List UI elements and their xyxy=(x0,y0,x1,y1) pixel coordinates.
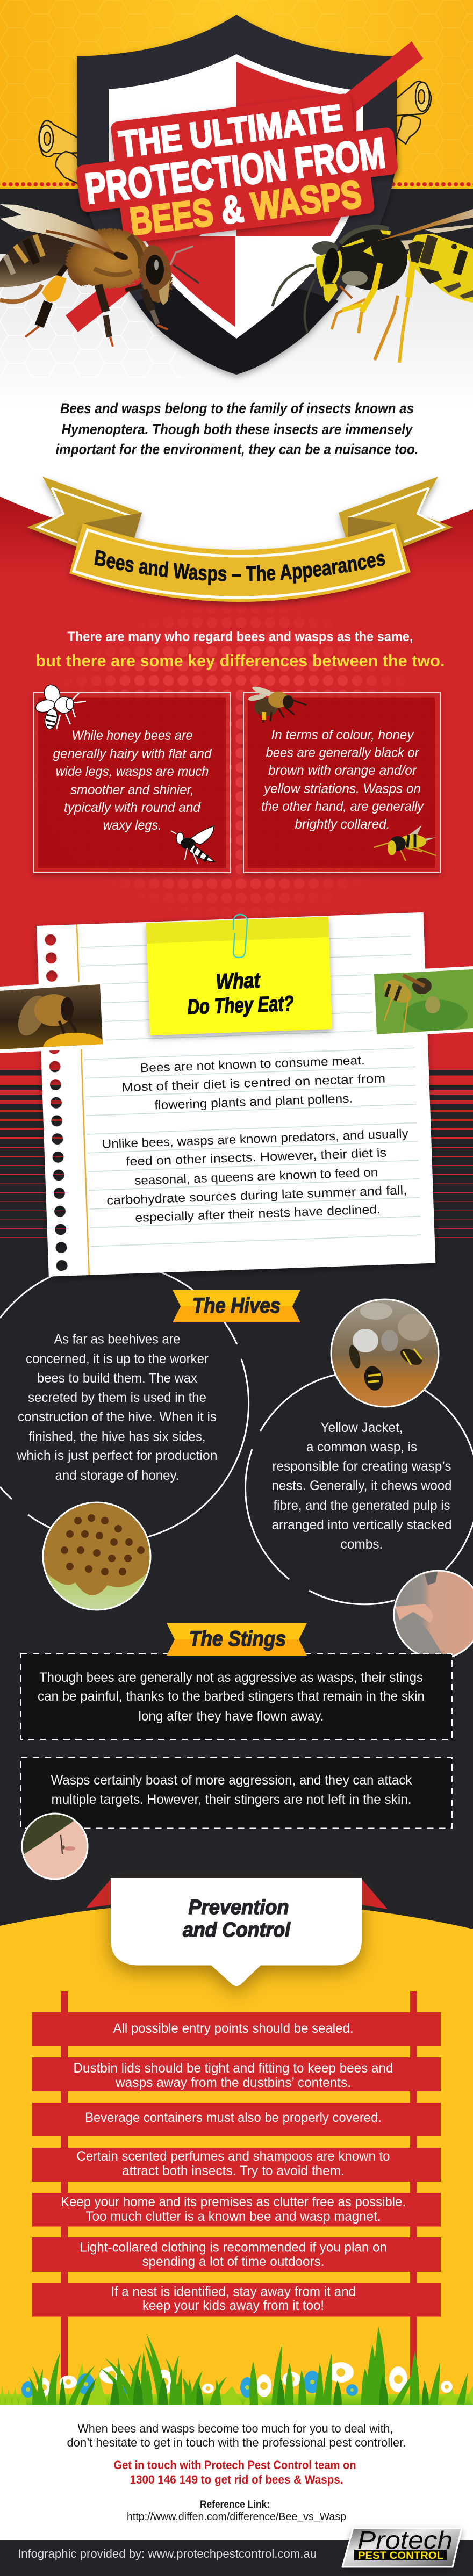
board: nest: If a nest is identified, stay away from it and xyxy=(111,2284,356,2299)
text: wasps diet: Unlike bees, wasps are known predators, and usually xyxy=(102,1126,409,1151)
footer bar: Infographic provided by: www.protechpestcontrol.com.au xyxy=(18,2547,317,2560)
text: beehives: concerned, it is up to the worker xyxy=(26,1351,209,1366)
yellow prevention background xyxy=(0,1901,473,2407)
banner: The Hives xyxy=(173,1290,300,1322)
header background xyxy=(0,0,473,409)
icon: line-art wasp xyxy=(171,826,215,864)
text: beehives: and storage of honey. xyxy=(55,1468,180,1483)
closing white panel xyxy=(0,2405,473,2540)
panel: bee stings box: Though bees are generally not as aggressive as wasps, their stings xyxy=(39,1670,423,1685)
title: BEES & WASPS xyxy=(127,172,364,243)
call to action xyxy=(114,2458,356,2486)
text: yellow jacket: a common wasp, is xyxy=(306,1440,417,1455)
icon: photo bee small xyxy=(247,685,306,723)
board: perfumes and shampoos xyxy=(32,2148,441,2182)
panel: bee and wasp colour: In terms of colour, honey xyxy=(271,728,414,743)
icon: right megaphone xyxy=(388,82,431,144)
text: yellow jacket: fibre, and the generated pulp is xyxy=(273,1498,450,1513)
text: beehives xyxy=(17,1332,217,1483)
photo: stinger in skin xyxy=(16,1811,88,1879)
icon: wasp xyxy=(273,209,473,363)
photo: wasp on leaf xyxy=(371,966,473,1038)
intro text: Bees and wasps belong to the family of insects known as xyxy=(60,400,414,416)
photo: swollen arm sting xyxy=(394,1570,473,1660)
board: clutter free: Keep your home and its premises as clutter free as possible. xyxy=(61,2194,406,2210)
illustration: grass and flowers xyxy=(0,2327,473,2405)
icon: line-art bee xyxy=(34,682,86,730)
panel: bee and wasp colour: brown with orange and/or xyxy=(268,763,418,778)
panel: bee and wasp colour: yellow striations. Wasps on xyxy=(263,781,421,796)
logo: Protech Pest Control: PEST CONTROL xyxy=(358,2550,443,2561)
striped transition to dark background xyxy=(0,1070,473,2037)
text: wasps diet: carbohydrate sources during late summer and fall, xyxy=(106,1183,407,1207)
reference link: http://www.diffen.com/difference/Bee_vs_Wasp xyxy=(127,2511,346,2523)
text: yellow jacket xyxy=(272,1420,452,1552)
sticky note: What Do They Eat?: Do They Eat? xyxy=(187,992,294,1019)
text: bees diet xyxy=(121,1053,386,1112)
text: bees diet: flowering plants and plant pollens. xyxy=(154,1091,353,1112)
text: bees diet: Bees are not known to consume meat. xyxy=(140,1053,365,1075)
panel: bee and wasp hair and legs: generally hairy with flat and xyxy=(53,746,212,761)
icon: left megaphone xyxy=(39,121,86,185)
callout: Prevention and Control xyxy=(111,1878,362,1986)
panel: wasp stings box xyxy=(21,1758,452,1828)
board: dustbin lids: wasps away from the dustbins’ contents. xyxy=(115,2075,351,2090)
text: yellow jacket: arranged into vertically stacked xyxy=(272,1517,452,1532)
sign posts xyxy=(61,1991,417,2384)
icon: photo wasp small xyxy=(374,825,436,861)
banner: The Stings xyxy=(167,1623,307,1656)
text: yellow jacket: nests. Generally, it chews wood xyxy=(272,1478,452,1493)
board: dustbin lids: Dustbin lids should be tight and fitting to keep bees and xyxy=(73,2061,393,2076)
board: clutter free xyxy=(32,2193,441,2227)
board: seal entry points: All possible entry points should be sealed. xyxy=(113,2021,354,2036)
sticky note: What Do They Eat? xyxy=(146,917,332,1035)
panel: bee and wasp hair and legs: While honey bees are xyxy=(72,728,192,743)
board: beverage containers: Beverage containers must also be properly covered. xyxy=(85,2110,382,2125)
panel: bee stings box: can be painful, thanks to the barbed stingers that remain in the skin xyxy=(38,1689,425,1704)
logo: Protech Pest Control xyxy=(342,2526,462,2567)
callout: Prevention and Control: Prevention xyxy=(188,1896,289,1919)
reference link: Reference Link: xyxy=(200,2499,270,2510)
closing text: When bees and wasps become too much for you to deal with, xyxy=(77,2422,393,2435)
board: nest xyxy=(32,2283,441,2317)
shield xyxy=(77,15,397,375)
text: wasps diet: seasonal, as queens are known to feed on xyxy=(134,1165,378,1188)
text: beehives: As far as beehives are xyxy=(54,1332,181,1347)
red callout ears xyxy=(86,1879,388,1909)
board: clothing xyxy=(32,2237,441,2272)
text: wasps diet: especially after their nests have declined. xyxy=(135,1202,381,1225)
panel: bee and wasp colour: brightly collared. xyxy=(295,817,390,832)
panel: bee and wasp hair and legs: typically with round and xyxy=(64,800,201,815)
board: nest: keep your kids away from it too! xyxy=(142,2298,324,2313)
photo: bee on flower xyxy=(0,982,105,1053)
icon: paper clip xyxy=(233,915,247,958)
text: beehives: bees to build them. The wax xyxy=(37,1371,197,1386)
lead text: There are many who regard bees and wasps as the same, xyxy=(68,629,413,644)
board: beverage containers xyxy=(32,2103,441,2136)
intro text xyxy=(56,400,418,457)
call to action: 1300 146 149 to get rid of bees & Wasps. xyxy=(130,2473,343,2486)
panel: bee and wasp hair and legs xyxy=(34,682,231,873)
text: beehives: construction of the hive. When it is xyxy=(18,1409,217,1424)
panel: notebook paper xyxy=(37,912,435,1277)
photo: wasp nest xyxy=(331,1299,439,1407)
panel: bee stings box xyxy=(21,1654,452,1739)
ribbon heading: Bees and Wasps – The Appearances: Bees and Wasps – The Appearances xyxy=(94,549,385,586)
text: beehives: secreted by them is used in the xyxy=(28,1390,206,1405)
title xyxy=(75,93,399,243)
panel: bee and wasp hair and legs: wide legs, wasps are much xyxy=(56,764,209,779)
lead text: but there are some key differences between the two. xyxy=(35,651,445,670)
lead text xyxy=(35,629,445,670)
footer bar xyxy=(0,2540,473,2576)
title: THE ULTIMATE xyxy=(117,97,345,165)
red diagonal band xyxy=(66,41,423,332)
logo: Protech Pest Control: Protech xyxy=(357,2526,453,2554)
panel: bee and wasp hair and legs: smoother and shinier, xyxy=(70,782,194,797)
text: beehives: which is just perfect for production xyxy=(17,1448,217,1463)
panel: bee and wasp colour: the other hand, are generally xyxy=(261,799,424,814)
panel: wasp stings box: Wasps certainly boast of more aggression, and they can attack xyxy=(51,1773,412,1788)
panel: bee and wasp colour: bees are generally black or xyxy=(266,745,420,760)
text: beehives: finished, the hive has six sides, xyxy=(29,1429,205,1444)
board: clutter free: Too much clutter is a known bee and wasp magnet. xyxy=(86,2209,381,2224)
intro text: important for the environment, they can be a nuisance too. xyxy=(56,441,418,457)
banner: The Hives: The Hives xyxy=(192,1294,281,1318)
red section background xyxy=(0,497,473,1075)
text: yellow jacket: responsible for creating wasp’s xyxy=(272,1459,452,1474)
text: yellow jacket: combs. xyxy=(341,1537,383,1552)
board: seal entry points xyxy=(32,2012,441,2046)
panel: wasp stings box: multiple targets. However, their stingers are not left in the skin. xyxy=(52,1792,412,1807)
board: clothing: spending a lot of time outdoors. xyxy=(142,2254,325,2269)
panel: bee and wasp hair and legs: waxy legs. xyxy=(103,818,161,833)
panel: bee and wasp colour xyxy=(243,685,440,873)
board: dustbin lids xyxy=(32,2057,441,2091)
text: wasps diet xyxy=(102,1126,409,1225)
blue flowers xyxy=(22,2371,358,2398)
reference link xyxy=(127,2499,346,2523)
intro text: Hymenoptera. Though both these insects are immensely xyxy=(61,421,413,437)
icon: honey bee xyxy=(0,204,199,347)
board: perfumes and shampoos: Certain scented perfumes and shampoos are known to xyxy=(76,2149,390,2164)
closing text xyxy=(67,2422,406,2449)
hive circle outlines xyxy=(0,1263,473,1604)
board: clothing: Light-collared clothing is recommended if you plan on xyxy=(80,2240,387,2255)
panel: bee stings box: long after they have flown away. xyxy=(139,1709,324,1724)
text: yellow jacket: Yellow Jacket, xyxy=(320,1420,403,1435)
white daisies xyxy=(37,2362,453,2397)
callout: Prevention and Control: and Control xyxy=(183,1919,291,1941)
sticky note: What Do They Eat?: What xyxy=(216,969,261,994)
call to action: Get in touch with Protech Pest Control team on xyxy=(114,2458,356,2472)
text: bees diet: Most of their diet is centred on nectar from xyxy=(121,1071,386,1095)
text: wasps diet: feed on other insects. However, their diet is xyxy=(126,1146,387,1168)
banner: The Stings: The Stings xyxy=(189,1627,286,1651)
grass blades xyxy=(28,2327,468,2405)
board: perfumes and shampoos: attract both insects. Try to avoid them. xyxy=(122,2163,345,2178)
ribbon heading: Bees and Wasps – The Appearances xyxy=(27,477,453,608)
closing text: don’t hesitate to get in touch with the professional pest controller. xyxy=(67,2436,406,2449)
photo: honeycomb xyxy=(43,1502,150,1610)
